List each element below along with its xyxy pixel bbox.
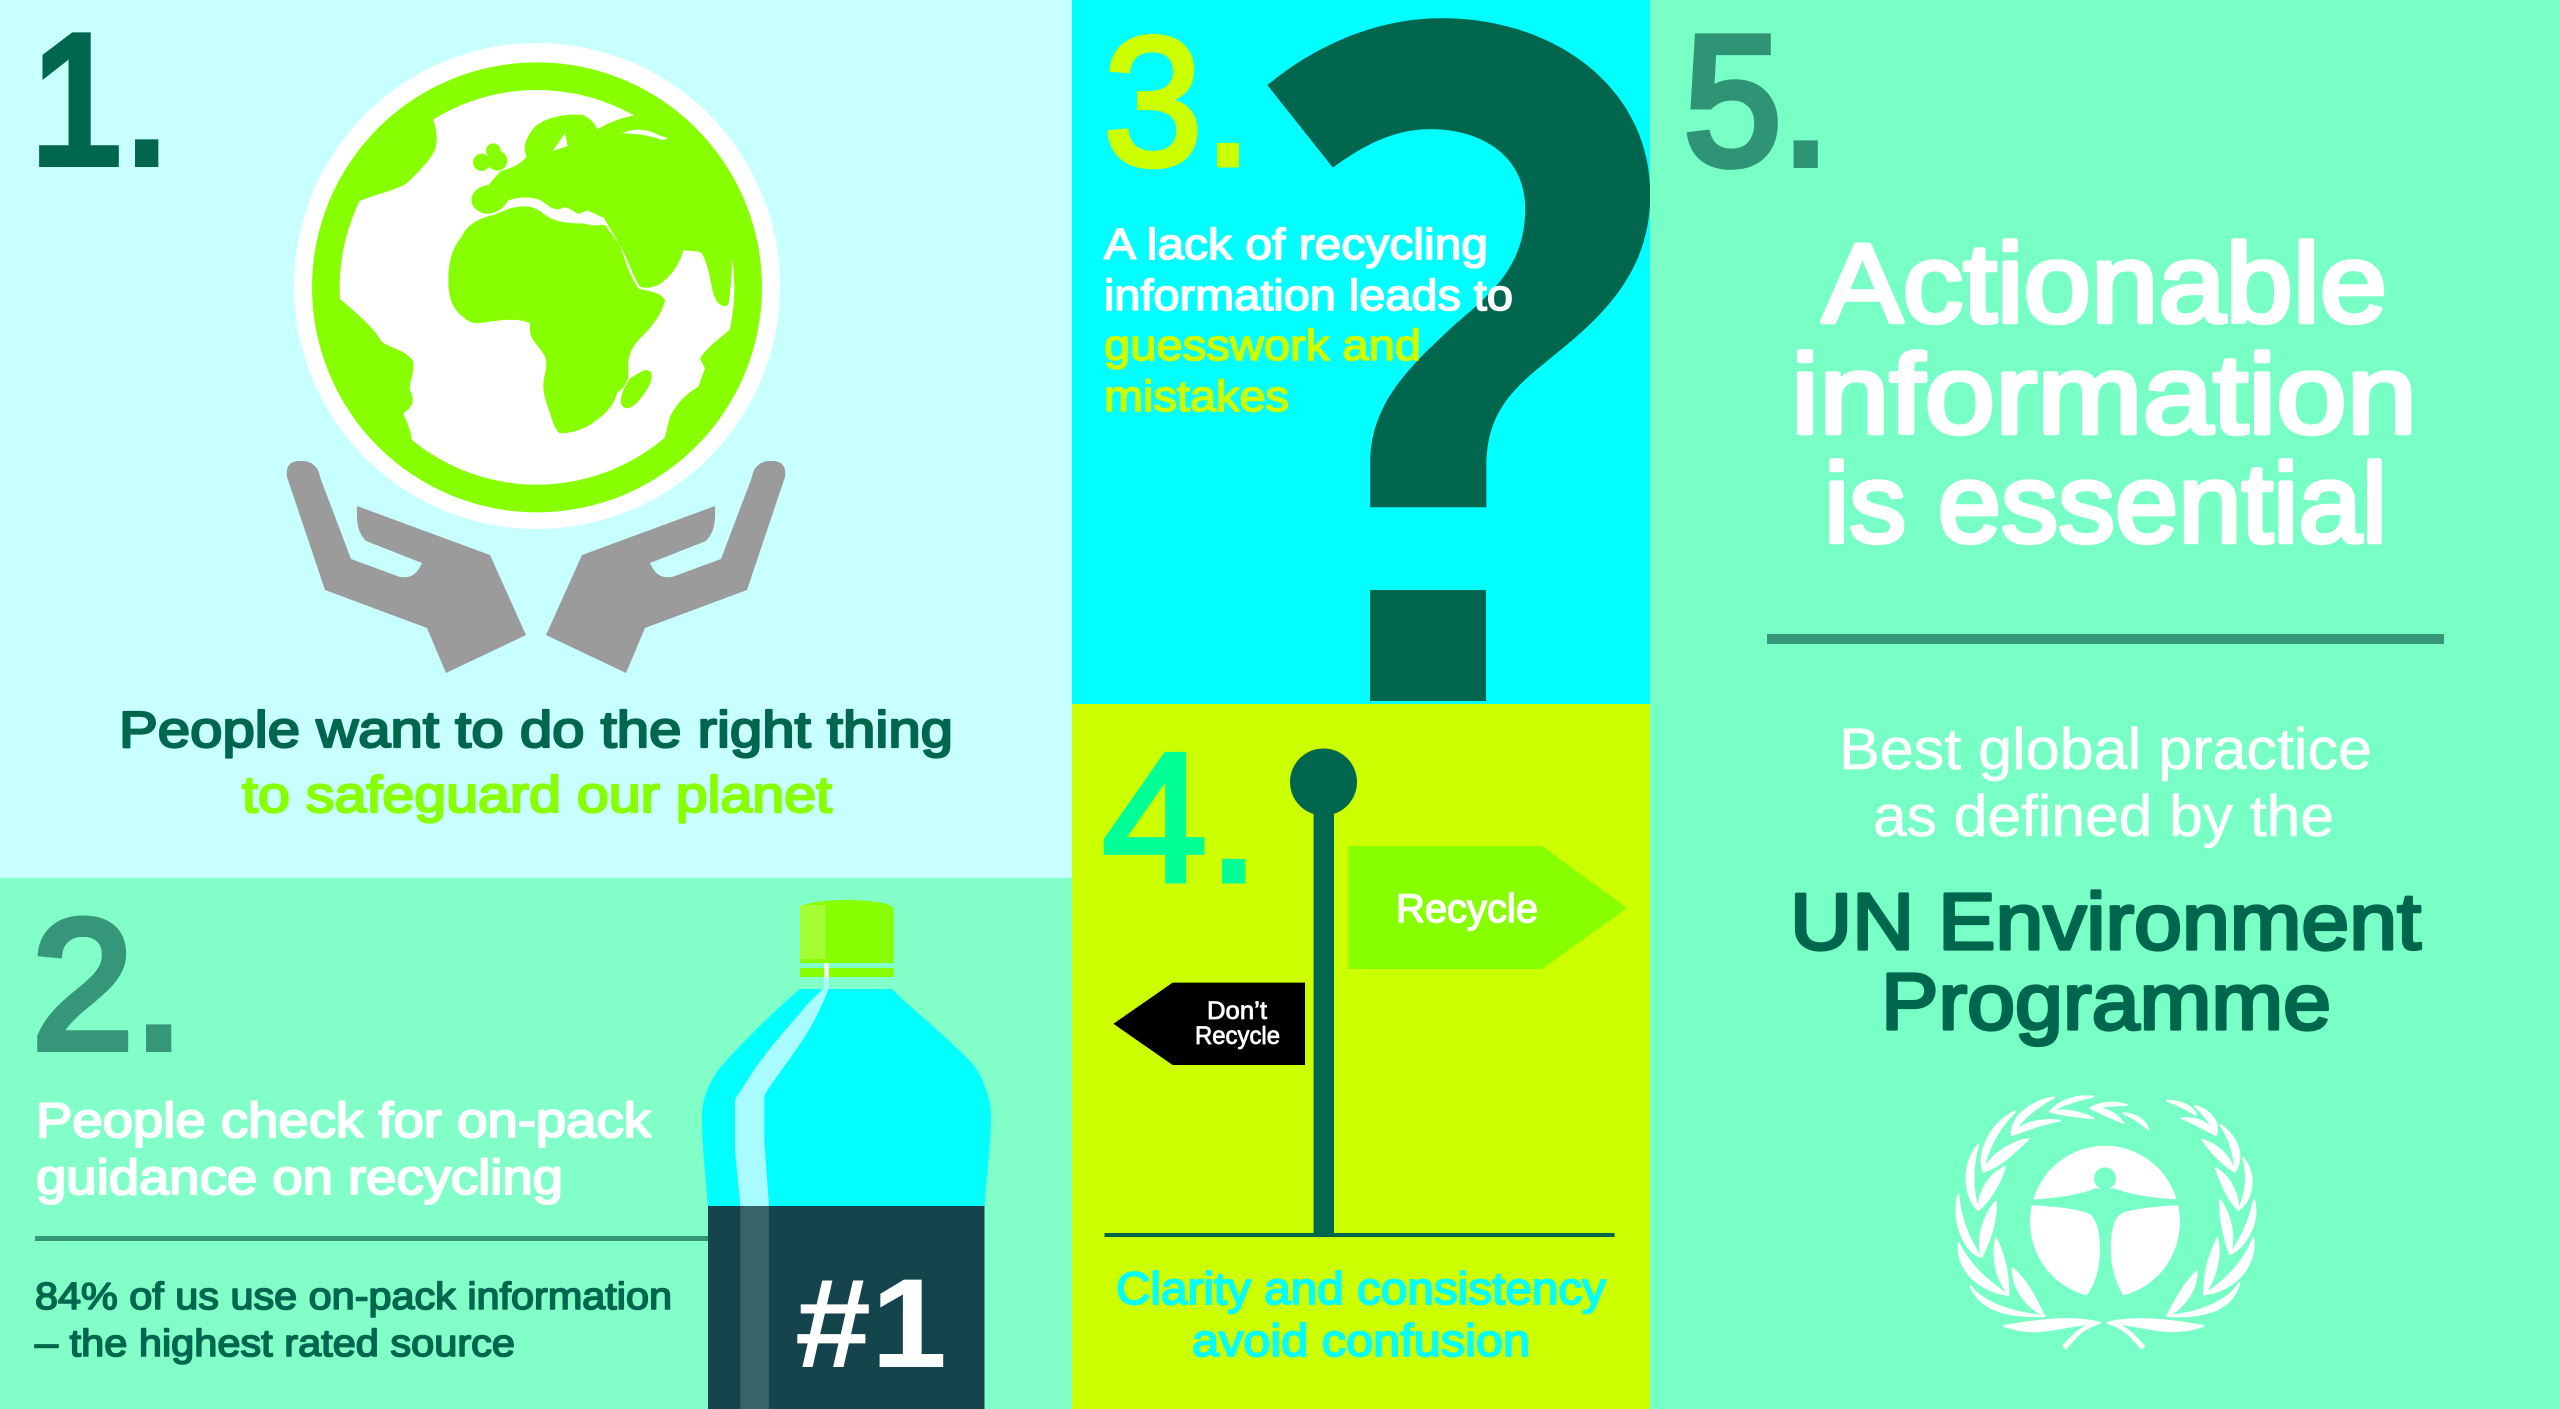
text: UN Environment Programme: [1790, 877, 2421, 1046]
number 1: 1.: [30, 0, 170, 202]
arrow: don't recycle: [1113, 983, 1305, 1065]
arrow: recycle: Recycle: [1396, 887, 1538, 931]
text: lack of recycling information: A lack of recycling: [1104, 220, 1488, 269]
text: guesswork and mistakes: [1104, 321, 1421, 421]
number 3: 3.: [1103, 0, 1253, 204]
panel 2: on-pack guidance: [0, 878, 1072, 1409]
icon: hands: [287, 461, 785, 673]
arrow: don't recycle: Recycle: [1195, 1022, 1280, 1050]
text: clarity and consistency: Clarity and consistency: [1116, 1263, 1607, 1314]
text: UN Environment Programme: Programme: [1881, 957, 2331, 1046]
text: 84% statistic: 84% of us use on-pack information: [35, 1276, 672, 1318]
text: #1: #1: [795, 1252, 947, 1394]
number 5: 5.: [1684, 0, 1830, 203]
text: avoid confusion: avoid confusion: [1192, 1315, 1530, 1366]
icon: UN Environment Programme emblem: [1956, 1096, 2255, 1348]
text: highest rated source: – the highest rated source: [35, 1323, 515, 1365]
icon: globe: [294, 43, 800, 529]
arrow: don't recycle: Don’t: [1207, 997, 1267, 1025]
text: UN Environment Programme: UN Environment: [1790, 877, 2421, 966]
number 4: 4.: [1102, 714, 1260, 920]
arrow: recycle: [1348, 846, 1627, 969]
text: best global practice: [1839, 717, 2372, 849]
icon: bottle: [702, 900, 991, 1409]
panel 4: clarity and consistency: [1072, 704, 1650, 1409]
text: guesswork and mistakes: guesswork and: [1104, 321, 1421, 370]
icon: signpost: [1104, 748, 1627, 1237]
text: best global practice: as defined by the: [1873, 784, 2334, 849]
text: guesswork and mistakes: mistakes: [1104, 372, 1289, 421]
text: best global practice: Best global practice: [1839, 717, 2372, 782]
panel 5: actionable information: [1650, 0, 2560, 1409]
heading: actionable information is essential: Actionable: [1822, 221, 2387, 346]
text: people check for on-pack: People check for on-pack: [36, 1094, 652, 1148]
text: to safeguard our planet: to safeguard our planet: [242, 766, 832, 823]
text: lack of recycling information: [1104, 220, 1513, 320]
number 2: 2.: [32, 881, 184, 1087]
heading: actionable information is essential: [1791, 221, 2417, 566]
text: people want to do the right thing: People want to do the right thing: [119, 701, 953, 758]
icon: question mark: [1267, 18, 1650, 701]
heading: actionable information is essential: is essential: [1824, 441, 2387, 566]
panel 1: people want to do the right thing: [0, 0, 1072, 878]
panel 3: lack of recycling information: [1072, 0, 1650, 704]
text: guidance on recycling: guidance on recycling: [36, 1151, 563, 1205]
heading: actionable information is essential: information: [1791, 332, 2417, 457]
text: lack of recycling information: information leads to: [1104, 271, 1513, 320]
